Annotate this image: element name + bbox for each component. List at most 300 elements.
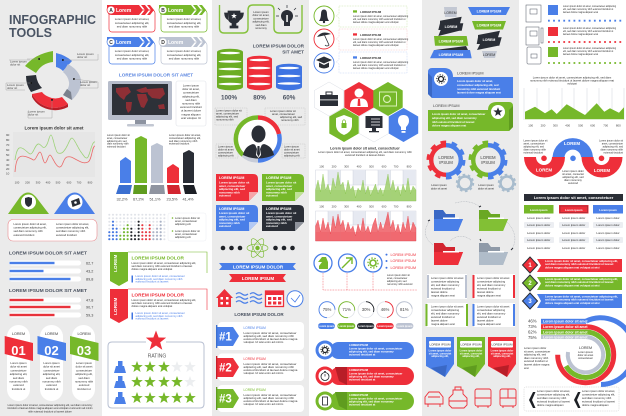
sticky card: red: amet, consectetuer — [219, 184, 246, 188]
numbered pills: sed diam — [78, 376, 90, 380]
folded flag cards: Lorem ipsum dolor — [491, 350, 513, 352]
numbered pills: Lorem ipsum — [10, 361, 27, 365]
gears — [428, 142, 515, 191]
settings card green: adipiscing elit, sed diam nonummy — [432, 116, 477, 120]
circled icons with dotted connectors: adipiscing elit, sed — [387, 280, 407, 283]
monitor text panel: euismod tincidunt — [180, 105, 202, 109]
rank card 3: euismod tincidunt ut laoreet dolore magna — [244, 399, 298, 403]
numbered pills — [5, 325, 99, 401]
rank card 1: Lorem ipsum dolor sit amet, consectetuer — [244, 331, 297, 335]
bordered text cards: consectetuer adipiscing — [477, 308, 506, 312]
green area chart: 700 — [603, 124, 609, 128]
trophy and bulb frame: Lorem ipsum — [253, 10, 270, 14]
numbered pills: consectetuer — [76, 368, 92, 372]
red ribbon: LOREM IPSUM — [242, 276, 274, 281]
icon callout: umbrella: Lorem ipsum dolor sit amet, consectetuer adipiscing — [353, 38, 409, 41]
icon callout: umbrella: laoreet dolore magna aliquam erat volutpat — [353, 44, 399, 47]
green spike chart: 500 — [369, 204, 374, 208]
numbered pills: 02 — [44, 343, 59, 358]
bordered text cards: magna aliquam erat — [477, 322, 501, 326]
dashed text boxes: adipiscing elit — [218, 154, 234, 158]
disk stack chart — [217, 49, 302, 102]
footer note: nibh euismod tincidunt ut laoreet dolore — [28, 410, 72, 413]
numbered pills: dolor sit amet — [43, 365, 60, 369]
long pill: blue gear — [316, 340, 414, 360]
notebook rows: elit, sed diam nonummy nibh euismod tincidunt ut — [563, 8, 614, 11]
sticky card: blue: Lorem ipsum dolor sit — [219, 211, 249, 215]
progress rings: 30% — [362, 307, 370, 312]
red progress bars — [9, 288, 93, 318]
line chart: 600 — [67, 180, 72, 184]
label card A — [107, 5, 155, 32]
gears: LOREM — [480, 155, 496, 160]
rank card 2: #2 — [219, 362, 232, 374]
label card A: Lorem — [116, 8, 132, 14]
wave diagram: diam nonummy nibh — [600, 148, 624, 152]
comparison table: Lorem ipsum dolor — [562, 223, 585, 227]
label card B: B — [161, 8, 165, 14]
green spike chart: 800 — [407, 204, 412, 208]
numbered pills: euismod — [13, 383, 24, 387]
long pill: green device: euismod tincidunt at — [349, 402, 375, 406]
zigzag stack right — [468, 7, 510, 58]
settings card green: dolore magna aliquam erat — [432, 124, 466, 128]
gears: dolor sit amet — [478, 186, 494, 190]
label card B — [159, 5, 207, 32]
settings card blue — [428, 68, 513, 98]
settings card blue: Lorem ipsum dolor sit amet, — [457, 79, 493, 83]
title: TOOLS — [9, 26, 52, 40]
gears: LOREM — [438, 155, 454, 160]
line chart: 30 — [6, 163, 10, 167]
dashed text boxes: consectetuer — [284, 150, 299, 154]
numbered pills: euismod — [79, 383, 90, 387]
disk stack chart: 100% — [221, 94, 237, 102]
dashed text boxes: Lorem ipsum dolor sit — [270, 109, 296, 113]
settings card green: nibh euismod tincidunt ut laoreet — [432, 120, 475, 124]
rank card 2: volutpat. Ut wisi enim ad minim — [244, 371, 284, 375]
radial bar chart: 46% — [528, 318, 537, 324]
rank card 1: euismod tincidunt ut laoreet dolore magna — [244, 337, 298, 341]
dashed chevron note: dolore magna aliquam — [537, 403, 564, 407]
numbered step bars: 1 — [528, 263, 532, 269]
green area chart: 600 — [590, 124, 596, 128]
footer note: Lorem ipsum dolor sit amet, consectetuer adipiscing elit, sed diam nonummy — [8, 404, 93, 407]
heading: world map: LOREM IPSUM DOLOR SIT AMET — [119, 72, 193, 78]
rating panel: RATING — [148, 354, 166, 360]
monitor text panel: dolor sit amet, — [182, 87, 200, 91]
label card D: consectetuer adipiscing elit, — [167, 53, 201, 57]
bordered text cards: elit, sed diam nonummy — [431, 312, 460, 316]
green spike chart: 200 — [332, 164, 337, 168]
notebook rows: laoreet dolore magna aliquam erat — [563, 33, 598, 36]
radial bar chart: Lorem ipsum dolor sit amet — [543, 320, 588, 324]
numbered step bars: dolore magna aliquam erat volutpat ut wisi — [545, 265, 600, 269]
wave diagram: diam nonummy nibh — [524, 148, 547, 152]
numbered step bars: Lorem ipsum dolor sit amet, consectetuer adipiscing elit, — [545, 259, 618, 263]
circled icons with dotted connectors: Lorem ipsum dolor sit — [387, 274, 410, 277]
folded flag cards: adipiscing elit, — [462, 355, 480, 358]
radial bar chart: diam nonummy nibh — [524, 356, 549, 360]
comparison table: Lorem ipsum dolor — [562, 238, 585, 242]
zigzag stack right: LOREM — [483, 53, 495, 57]
zigzag stack left: LOREM — [445, 25, 457, 29]
trophy and bulb frame: consectetuer — [253, 16, 269, 20]
disk stack chart: 60% — [283, 94, 296, 102]
numbered step bars: sed diam nonummy nibh euismod tincidunt ut laoreet — [545, 280, 613, 284]
circled icons with dotted connectors: amet, consectetuer — [387, 277, 408, 280]
numbered pills: consectetuer — [43, 368, 60, 372]
folded flag cards: LOREM IPSUM — [460, 342, 482, 346]
donut chart: Lorem ipsum — [10, 60, 27, 64]
green ribbon card: dolore magna aliquam erat volutpat — [132, 267, 172, 271]
red text box: sed diam nonummy nibh — [56, 229, 86, 233]
label card D: D — [161, 40, 165, 46]
settings card green — [428, 102, 513, 131]
zigzag stack left — [430, 7, 472, 58]
folded flag cards: Lorem ipsum dolor — [429, 350, 451, 352]
arrow bar chart — [107, 133, 201, 202]
dot chart legend: adipiscing elit — [175, 235, 191, 239]
sticky card: green: nonummy nibh — [266, 190, 287, 194]
long pill: blue gear: LOREM IPSUM — [349, 343, 369, 347]
trophy and bulb frame: sed diam — [256, 23, 267, 27]
folded flag cards: sit amet, consectet — [429, 352, 451, 355]
numbered pills: LOREM — [45, 332, 58, 336]
hexagon icon grid — [314, 82, 418, 142]
dashed chevron note: sed diam nonummy nibh — [537, 396, 567, 400]
donut chart: dolor sit — [10, 63, 20, 67]
label card A: A — [109, 8, 113, 14]
rank card 1: #1 — [219, 332, 232, 344]
arrow bar chart: 67,2% — [133, 196, 145, 202]
folded flag cards: adipiscing elit, — [493, 355, 511, 358]
dot chart legend: amet, consectetuer — [175, 219, 197, 223]
blue progress bars — [9, 250, 93, 282]
green spike chart: 600 — [382, 164, 387, 168]
numbered pills: adipiscing elit, — [43, 372, 61, 376]
label card D: Lorem ipsum dolor sit amet, — [167, 49, 201, 53]
radial bar chart: sit amet, consectetuer — [524, 349, 550, 353]
dashed text boxes — [215, 108, 305, 158]
green spike chart: 400 — [357, 164, 362, 168]
blue ribbon: LOREM IPSUM DOLOR — [233, 264, 284, 270]
bordered text cards: Lorem ipsum dolor sit amet — [477, 276, 510, 280]
radial bar chart: dolor sit amet — [578, 353, 594, 357]
numbered pills: consectetuer — [10, 368, 27, 372]
arrow bar chart: euismod tincidunt — [169, 142, 189, 146]
numbered pills: 01 — [11, 343, 26, 358]
green area chart: Lorem ipsum dolor sit amet, consectetuer adipiscing elit, sed diam — [533, 76, 612, 80]
bordered text cards: laoreet dolore — [431, 290, 448, 294]
arrow bar chart: 32,2% — [116, 196, 128, 202]
numbered step bars: 3 — [528, 299, 532, 305]
radial bar chart: Lorem ipsum — [578, 350, 593, 354]
folded flag cards: sit amet, consectet — [491, 352, 513, 355]
wave diagram: adipiscing elit, sed — [562, 175, 584, 179]
comparison table: Lorem ipsum — [599, 208, 617, 212]
gears: Lorem ipsum — [431, 183, 448, 187]
radial bar chart: consectetuer — [578, 356, 593, 360]
label card C — [107, 37, 155, 64]
red text box: euismod tincidunt — [14, 233, 35, 237]
line chart: 10 — [6, 172, 10, 176]
comparison table: Lorem ipsum dolor — [527, 216, 550, 220]
numbered step bars: Lorem ipsum dolor sit amet, consectetuer adipiscing elit, — [545, 294, 618, 298]
wave diagram: euismod — [568, 181, 578, 185]
bordered text cards: euismod tincidunt ut — [431, 315, 455, 319]
dashed chevron note: consectetuer adipiscing elit, — [537, 392, 570, 396]
zigzag stack left: LOREM IPSUM — [439, 40, 463, 44]
green ribbon card: LOREM — [113, 255, 119, 272]
label card C: C — [109, 40, 113, 46]
arrow bar chart: consectetuer adipiscing elit, — [169, 136, 201, 140]
numbered pills: adipiscing elit, — [75, 372, 93, 376]
red ribbon card: adipiscing elit, sed diam nonummy nibh — [136, 314, 183, 318]
green area chart: 300 — [553, 124, 558, 128]
label card B: Lorem — [168, 8, 184, 14]
hexagon caption — [318, 146, 412, 157]
green spike chart: 300 — [344, 164, 349, 168]
monitor text panel: adipiscing elit, — [182, 94, 200, 98]
icon callout: bell: laoreet dolore magna aliquam erat volutpat — [353, 21, 399, 24]
radial bar chart: laoreet dolore magna — [524, 362, 550, 366]
icon callout: bell: Lorem ipsum dolor sit amet, consectetuer adipiscing — [353, 15, 409, 18]
radial bar chart: 75% — [528, 335, 537, 340]
dashed text boxes: Lorem ipsum — [218, 144, 233, 148]
radial bar chart: 62% — [528, 330, 537, 334]
red text box: Lorem ipsum dolor sit amet, — [14, 222, 47, 226]
dashed text boxes: amet, consectetuer — [272, 112, 295, 116]
settings card blue: nonummy nibh euismod tincidunt — [457, 87, 500, 91]
dot chart legend: adipiscing elit — [175, 222, 191, 226]
green spike chart: 100 — [319, 204, 325, 208]
rank card 1: volutpat. Ut wisi enim ad minim — [244, 340, 284, 344]
green area chart: 100 — [528, 124, 534, 128]
arrow bar chart: 23,5% — [166, 196, 178, 202]
dashed chevron note: Lorem ipsum dolor sit amet, — [582, 389, 615, 393]
comparison table: Lorem ipsum dolor — [527, 231, 550, 235]
green spike chart: 300 — [344, 204, 349, 208]
bordered text cards: magna aliquam erat — [431, 294, 455, 298]
numbered pills: tincidunt ut — [12, 387, 25, 391]
monitor text panel: nonummy nibh — [182, 102, 201, 106]
line chart: 90 — [6, 133, 10, 137]
person ring diagram — [234, 115, 282, 163]
bordered text cards: magna aliquam erat — [431, 322, 455, 326]
blue progress bars: 43,2 — [86, 270, 93, 274]
icon callout: umbrella: elit, sed diam nonummy nibh euismod tincidunt ut — [353, 41, 406, 44]
line chart: 500 — [56, 180, 61, 184]
dashed text boxes: nonummy nibh — [216, 118, 234, 122]
wave diagram: Lorem ipsum dolor sit — [524, 140, 548, 142]
label card A: sed diam nonummy nibh — [117, 25, 148, 29]
green ribbon card: Lorem ipsum dolor sit amet, consectetuer — [136, 274, 185, 278]
icon row: house, waves, calendar, clock — [216, 289, 303, 307]
sticky card: red: nonummy nibh — [219, 190, 240, 194]
numbered pills: dolor sit amet — [10, 365, 27, 369]
label card D — [159, 37, 207, 64]
dashed text boxes: consectetuer — [218, 150, 233, 154]
heading: disk stacks: SIT AMET — [282, 50, 304, 54]
hexagon caption: Lorem ipsum dolor sit amet, consectetuer adipiscing elit, sed diam nonummy nibh — [318, 150, 412, 154]
donut chart — [6, 51, 98, 118]
green spike chart: 100 — [319, 164, 325, 168]
numbered pills: nonummy nibh — [42, 380, 61, 384]
green ribbon card: euismod tincidunt ut laoreet — [136, 280, 169, 284]
blue progress bars: LOREM IPSUM DOLOR SIT AMET — [9, 250, 87, 256]
donut chart: Lorem ipsum — [80, 80, 97, 84]
icon callout: umbrella — [314, 29, 409, 50]
sticky card: black — [262, 205, 304, 231]
atom icon with dots — [221, 237, 295, 259]
wave diagram: LOREM — [594, 168, 610, 173]
red progress bars: 47,8 — [86, 298, 93, 302]
monitor with world map — [108, 81, 172, 126]
numbered pills: euismod — [46, 383, 57, 387]
numbered pills: nonummy nibh — [9, 380, 28, 384]
comparison table: Lorem ipsum — [565, 208, 583, 212]
sticky card: black: euismod — [266, 224, 278, 228]
sticky card: blue: amet, consectetuer — [219, 214, 246, 218]
line chart — [6, 126, 95, 184]
label card A: consectetuer adipiscing elit, — [115, 21, 149, 25]
green ribbon card: LOREM IPSUM DOLOR — [132, 256, 185, 262]
folder cycle — [425, 202, 515, 265]
sticky card: black: Lorem ipsum dolor sit — [266, 211, 296, 215]
green ribbon card: sed diam nonummy nibh euismod tincidunt ut laoreet — [132, 264, 192, 268]
wave diagram: amet, consectetuer — [602, 142, 623, 146]
footer note: tincidunt ut laoreet dolore magna aliquam erat volutpat ut wisi enim ad minim — [8, 407, 92, 410]
numbered pills: dolor sit amet — [76, 365, 93, 369]
notebook rows: elit, sed diam nonummy nibh euismod tincidunt ut — [563, 50, 614, 53]
wave diagram: Lorem ipsum dolor — [562, 169, 584, 173]
green spike chart: 600 — [382, 204, 387, 208]
rank card 2: LOREM IPSUM — [244, 357, 266, 361]
green ribbon card: Lorem ipsum dolor sit amet, consectetuer adipiscing elit, — [132, 261, 196, 265]
gears: IPSUM — [439, 160, 453, 165]
numbered pills: sed diam — [13, 376, 25, 380]
green spike chart: 700 — [394, 164, 399, 168]
monitor text panel: sed diam — [185, 98, 197, 102]
bordered text cards: Lorem ipsum dolor sit amet — [431, 304, 464, 308]
line chart: 300 — [36, 180, 41, 184]
green spike chart: 500 — [369, 164, 374, 168]
notebook rows: Lorem ipsum dolor sit amet, consectetuer adipiscing — [563, 5, 617, 8]
progress rings: Lorem ipsum — [338, 325, 355, 328]
wave diagram: amet, consectetuer — [524, 142, 545, 146]
green area chart: 500 — [578, 124, 584, 128]
line chart: 800 — [88, 180, 93, 184]
bordered text cards: elit, sed diam nonummy — [477, 283, 506, 287]
green spike chart: 800 — [407, 164, 412, 168]
bordered text cards: laoreet dolore — [431, 318, 448, 322]
dashed chevron note: euismod tincidunt ut laoreet — [537, 400, 570, 404]
monitor text panel: erat volutpat. Ut — [181, 116, 201, 120]
donut chart: Lorem ipsum — [7, 83, 24, 87]
radial bar chart — [524, 318, 626, 384]
radial bar chart: Lorem ipsum dolor sit amet — [543, 335, 588, 339]
label card A: Lorem ipsum dolor sit amet, — [115, 17, 149, 21]
dashed chevron note: euismod tincidunt ut laoreet — [582, 400, 615, 404]
green area chart: volutpat — [567, 82, 577, 86]
bordered text cards: euismod tincidunt ut — [477, 315, 501, 319]
progress rings: 46% — [381, 307, 389, 312]
arrow bar chart: sed diam nonummy nibh — [169, 139, 198, 143]
dashed text boxes: adipiscing elit — [284, 154, 300, 158]
gears: IPSUM — [481, 160, 495, 165]
long pill: red timer — [316, 366, 414, 386]
sticky card: green: LOREM IPSUM — [266, 176, 291, 180]
wave diagram: adipiscing elit, sed — [524, 146, 545, 148]
icon row caption: LOREM IPSUM DOLOR — [234, 312, 284, 317]
sticky card: green: Lorem ipsum dolor sit — [266, 180, 296, 184]
sticky card: red: Lorem ipsum dolor sit — [219, 180, 249, 184]
line chart: 20 — [6, 167, 10, 171]
comparison table: Lorem ipsum dolor — [596, 216, 620, 220]
dashed text boxes: dolor sit amet — [284, 148, 300, 152]
red spike chart — [316, 211, 416, 241]
comparison table: Lorem ipsum dolor — [527, 246, 550, 250]
red ribbon card: sed diam nonummy nibh euismod tincidunt ut laoreet — [132, 301, 192, 305]
dot chart legend: amet, consectetuer — [175, 232, 197, 236]
arrow bar chart: 41,4% — [182, 196, 194, 202]
donut chart: dolor sit — [77, 55, 87, 59]
green area chart: nonummy nibh euismod tincidunt ut laoreet dolore magna aliquam erat — [530, 78, 614, 82]
red text box: euismod tincidunt — [56, 233, 77, 237]
trophy and bulb frame: nonummy — [255, 27, 268, 30]
title — [9, 13, 96, 40]
bordered text cards: elit, sed diam nonummy — [477, 312, 506, 316]
red ribbon card: LOREM — [113, 298, 119, 315]
numbered pills: Lorem ipsum — [43, 361, 60, 365]
bordered text cards: Lorem ipsum dolor sit amet — [477, 304, 510, 308]
donut chart: Lorem ipsum — [28, 110, 45, 114]
long pill: red timer: adipiscing elit, sed diam nonummy — [349, 374, 394, 378]
comparison table: Lorem ipsum dolor — [562, 246, 585, 250]
sticky card: black: nonummy nibh — [266, 221, 287, 225]
wave diagram: diam nonummy — [564, 178, 583, 182]
red text box: consectetuer adipiscing elit, — [14, 226, 47, 230]
label card C: Lorem — [116, 40, 132, 46]
line chart: 700 — [77, 180, 82, 184]
blue progress bars: 89,8 — [86, 278, 93, 282]
comparison table: Lorem ipsum dolor — [596, 246, 620, 250]
comparison table: Lorem ipsum dolor — [527, 223, 550, 227]
line chart: 50 — [6, 153, 10, 157]
label card B: Lorem ipsum dolor sit amet, — [167, 17, 201, 21]
bordered text cards: consectetuer adipiscing — [431, 280, 460, 284]
dashed text boxes: adipiscing elit, sed — [216, 114, 238, 118]
circled icons with dotted connectors: LOREM IPSUM — [390, 266, 416, 270]
arrow bar chart: diam nonummy nibh — [107, 143, 129, 146]
dashed text boxes: Lorem ipsum dolor sit — [216, 108, 242, 112]
icon callout: umbrella: LOREM IPSUM — [360, 33, 382, 37]
folded flag cards — [426, 337, 516, 377]
dashed text boxes: adipiscing elit, sed — [280, 115, 302, 119]
green ribbon card: adipiscing elit, sed diam nonummy nibh — [136, 277, 183, 281]
red ribbon card: euismod tincidunt ut laoreet — [136, 317, 169, 321]
wave diagram: LOREM — [536, 168, 552, 172]
radial bar chart: euismod tincidunt ut — [524, 359, 548, 363]
radial bar chart: adipiscing elit, sed — [524, 353, 546, 357]
numbered pills: LOREM — [12, 332, 25, 336]
line chart: 100 — [15, 180, 20, 184]
numbered step bars — [522, 257, 622, 309]
sticky card: blue — [216, 205, 258, 231]
trophy and bulb frame: adipiscing elit, — [253, 20, 270, 24]
progress rings — [318, 299, 415, 329]
